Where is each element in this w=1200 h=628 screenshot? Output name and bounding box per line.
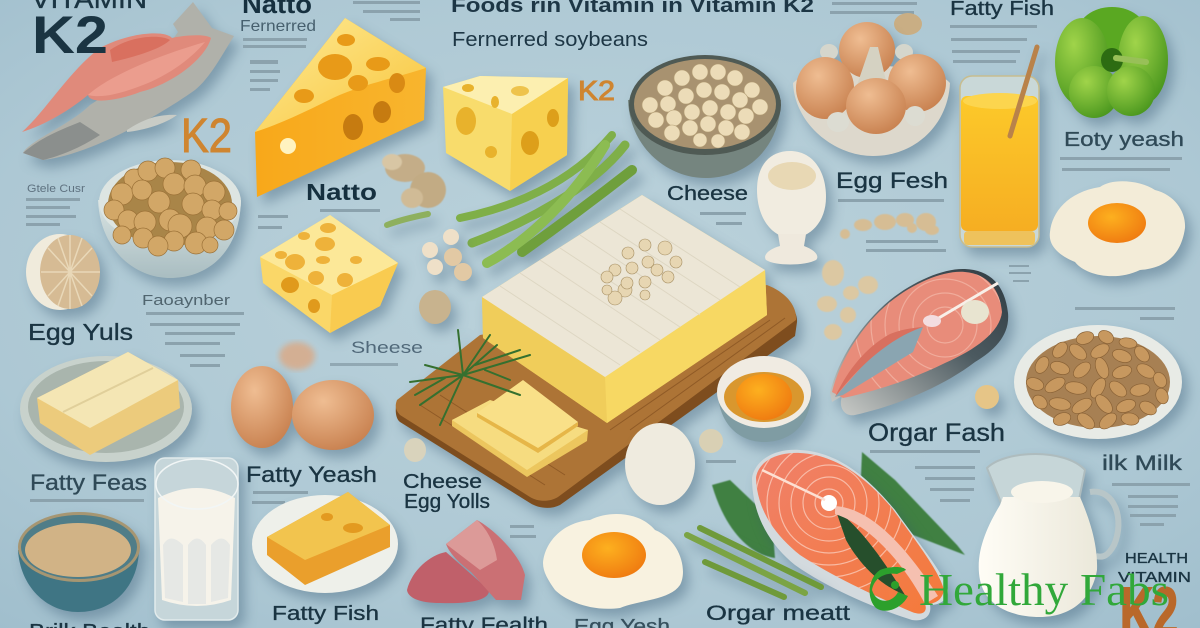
text: small caption by salmon <box>1009 265 1031 282</box>
label: Fatty Yeash <box>246 462 377 504</box>
label: bottom row text: Fatty Fish <box>272 603 379 625</box>
label: Fatty Fish top <box>950 0 1054 63</box>
label: Natto mid: Natto <box>306 179 377 205</box>
label: K2 orange mid: K2 <box>578 75 615 106</box>
icon: small nuts by salmon <box>817 260 878 340</box>
icon: herb behind salmon <box>712 452 965 590</box>
label: Cheese Egg Yolls: Cheese <box>403 471 482 493</box>
title: Fernerred soybeans <box>452 29 648 51</box>
icon: sliced round <box>26 234 100 310</box>
icon: asparagus sticks <box>687 528 821 597</box>
label: Fatty Feas <box>30 470 147 502</box>
text: captions around plate <box>961 300 1175 324</box>
icon: fried egg top right <box>1050 181 1185 276</box>
label: Milk: ilk Milk <box>1102 452 1183 475</box>
label: Sheese <box>279 338 423 370</box>
icon: bowl of grains <box>18 512 140 612</box>
text: small coin labels <box>404 429 736 463</box>
icon: fish with salmon fillet <box>22 2 234 160</box>
icon: cutting board with block cheese <box>396 195 797 508</box>
icon: nut row <box>840 213 939 239</box>
icon: asparagus <box>387 135 632 263</box>
label: Eoty yeash <box>1060 129 1184 171</box>
text: top centre caption <box>353 1 420 21</box>
label: Fatty Feas: Fatty Feas <box>30 470 147 495</box>
label: Health Vitamin: VITAMIN <box>1118 569 1191 586</box>
icon: soybean bowl <box>628 55 781 178</box>
label: Sheese: Sheese <box>351 338 423 357</box>
logo: Healthy Fabs watermark: Healthy Fabs <box>919 564 1169 615</box>
label: Egg Fesh <box>836 168 948 252</box>
text block: left caption <box>26 183 85 226</box>
icon: salmon steak lower <box>752 450 958 628</box>
heading: Vitamin K2 <box>31 0 147 65</box>
label: Cheese top <box>667 183 748 225</box>
butter slices <box>452 408 588 477</box>
label: Eoty yeash: Eoty yeash <box>1064 129 1184 151</box>
icon: cheese on plate <box>252 492 398 593</box>
label: Milk <box>1102 452 1190 526</box>
icon: egg cup <box>757 151 826 264</box>
text: Faoaynber caption <box>142 292 244 367</box>
icon: cheese block top <box>443 76 568 191</box>
icon: white egg <box>625 423 695 505</box>
label: Cheese Egg Yolls: Egg Yolls <box>404 491 490 513</box>
icon: butter plate left <box>20 352 192 462</box>
icon: egg yolk in bowl <box>717 356 811 442</box>
label: Fatty Yeash: Fatty Yeash <box>246 462 377 487</box>
herb sprig <box>410 330 530 425</box>
icon: large cheese wedge <box>255 18 426 197</box>
icon: small seed <box>975 385 999 409</box>
icon: plate of nuts right <box>1014 325 1182 439</box>
label: Orgar Fash <box>868 419 1005 502</box>
label: Orgar Fash: Orgar Fash <box>868 419 1005 447</box>
text: Faoaynber caption: Faoaynber <box>142 292 230 309</box>
label: bottom row text: Orgar meatt <box>706 602 850 625</box>
label: Natto Fermented <box>240 0 316 91</box>
icon: two brown eggs <box>231 366 374 450</box>
icon: glass of milk <box>155 458 238 620</box>
icon: bowl of beans left <box>98 158 241 278</box>
label: Egg Yuls: Egg Yuls <box>28 319 133 345</box>
icon: green pepper <box>1055 7 1168 118</box>
label: Health Vitamin <box>1118 550 1191 586</box>
text: caption above eggs <box>830 2 922 35</box>
icon: egg bowl <box>793 22 950 156</box>
block cheese <box>482 195 767 423</box>
icon: juice glass with straw <box>960 47 1039 247</box>
label: Cheese Egg Yolls <box>403 471 490 513</box>
label: Natto Fermented: Fernerred <box>240 18 316 35</box>
label: bottom row text <box>29 602 850 628</box>
icon: small beans and mushroom <box>419 229 472 324</box>
text: small caption above fried egg <box>510 525 536 538</box>
label: Natto mid <box>258 179 380 229</box>
icon: milk jug <box>979 454 1118 617</box>
label: K2 orange: K2 <box>181 110 232 163</box>
label: Egg Fesh: Egg Fesh <box>836 168 948 193</box>
title <box>451 0 814 51</box>
heading: Vitamin K2: K2 <box>32 6 108 65</box>
icon: mushroom cluster <box>382 154 446 208</box>
label: Cheese top: Cheese <box>667 183 748 205</box>
icon: cheese block mid <box>260 215 398 333</box>
label: Health Vitamin: HEALTH <box>1125 550 1188 567</box>
icon: fried egg bottom <box>543 514 683 609</box>
icon: salmon steak upper <box>830 269 1020 428</box>
icon: raw meat <box>407 520 525 603</box>
text block: left caption: Gtele Cusr <box>27 183 85 195</box>
